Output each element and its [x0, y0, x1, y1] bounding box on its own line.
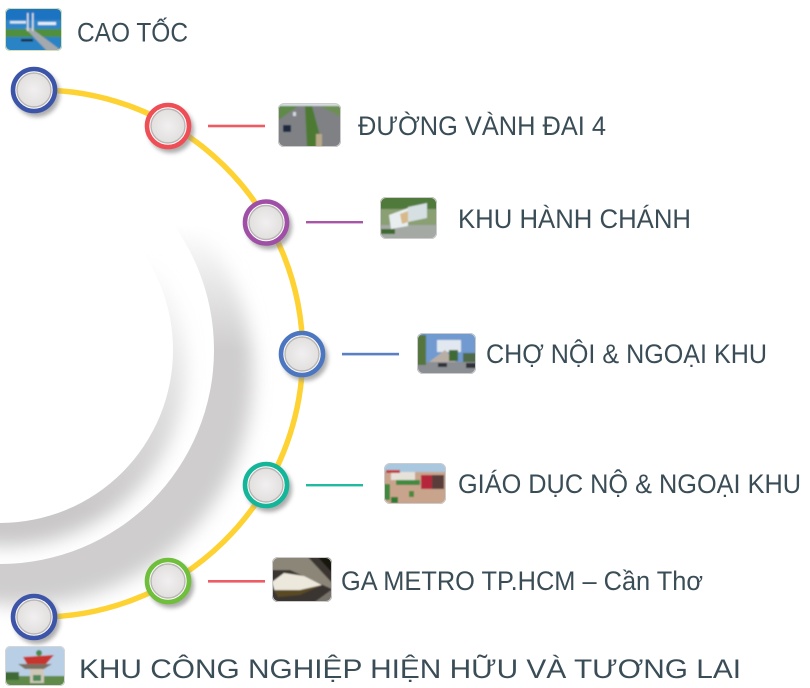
photo: bridge	[5, 8, 62, 51]
photo: administrative building	[380, 197, 437, 239]
label: administrative area: KHU HÀNH CHÁNH	[458, 204, 691, 234]
label: markets: CHỢ NỘI & NGOẠI KHU	[486, 338, 767, 369]
label: metro station: GA METRO TP.HCM – Cần Thơ	[341, 566, 703, 596]
node: purple	[245, 202, 292, 250]
node: bottom navy	[13, 596, 60, 644]
connector: purple, administrative area	[306, 221, 363, 223]
label: expressway: CAO TỐC	[77, 16, 188, 48]
photo: highway	[278, 103, 341, 147]
background circles with soft shadows	[0, 245, 262, 614]
node: red	[147, 105, 194, 153]
node: blue	[281, 333, 328, 381]
label: industrial parks: KHU CÔNG NGHIỆP HIỆN HỮU VÀ TƯƠNG LAI	[79, 653, 741, 684]
connector: red, ring road	[208, 125, 265, 127]
photo: industrial park gate	[5, 646, 65, 686]
photo: school	[384, 463, 446, 504]
yellow arc	[34, 90, 303, 617]
connector: blue, markets	[342, 353, 399, 355]
connector: teal, education	[306, 484, 363, 486]
connector: red, metro	[208, 580, 265, 583]
node: teal	[245, 464, 292, 512]
photo: metro train	[272, 557, 332, 602]
node: green	[147, 560, 194, 608]
photo: market street	[417, 333, 476, 374]
label: ring road 4: ĐƯỜNG VÀNH ĐAI 4	[358, 110, 606, 141]
node: top navy	[13, 69, 60, 117]
